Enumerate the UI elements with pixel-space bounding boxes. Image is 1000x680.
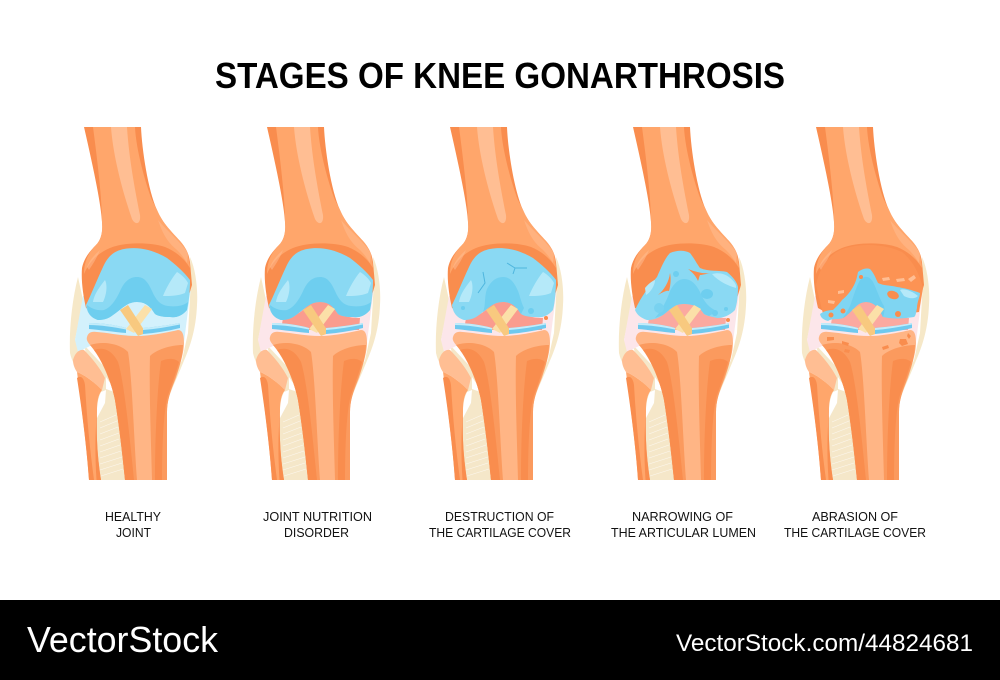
caption: healthy joint [105,510,162,540]
caption: destruction of the cartilage cover [429,510,571,540]
footer image id: VectorStock.com/44824681 [676,630,973,657]
knee 4: narrowing of the articular lumen [619,127,746,480]
knee 3: destruction of the cartilage cover [436,127,563,480]
caption: joint nutrition disorder: DISORDER [284,526,349,540]
knee 2: joint nutrition disorder [253,127,380,480]
red tissue [647,300,726,330]
inflamed synovium [807,287,923,352]
synovial fluid [75,287,191,352]
cracks [478,263,527,293]
cracks [658,269,710,295]
caption: abrasion of the cartilage cover: THE CARTILAGE COVER [784,526,926,540]
worn cartilage [820,268,920,321]
caption: healthy joint: HEALTHY [105,510,162,524]
footer bar [0,600,1000,680]
caption: joint nutrition disorder: JOINT NUTRITION [263,510,372,524]
tibial lesions [827,333,911,353]
captions [105,510,926,540]
exposed bone [816,245,923,318]
caption: narrowing of the articular lumen: THE ARTICULAR LUMEN [611,526,756,540]
cracked cartilage [452,248,556,320]
caption: abrasion of the cartilage cover: ABRASION OF [812,510,898,524]
red tissue [281,300,360,330]
footer logo text: VectorStock [27,619,219,660]
caption: destruction of the cartilage cover: THE CARTILAGE COVER [429,526,571,540]
red tissue [830,300,909,330]
caption: narrowing of the articular lumen [611,510,756,540]
healthy cartilage [86,248,190,320]
caption: abrasion of the cartilage cover [784,510,926,540]
thinning cartilage [269,248,373,320]
inflamed synovium [441,287,557,352]
caption: narrowing of the articular lumen: NARROWING OF [632,510,733,524]
red tissue [464,300,543,330]
title: STAGES OF KNEE GONARTHROSIS [215,55,785,96]
caption: joint nutrition disorder [263,510,372,540]
eroded cartilage [635,251,738,322]
inflamed synovium [258,287,374,352]
caption: healthy joint: JOINT [116,526,151,540]
knee 5: abrasion of the cartilage cover [802,127,929,480]
inflamed synovium [624,287,740,352]
knee 1: healthy joint [70,127,197,480]
bone lesions [886,289,900,301]
caption: destruction of the cartilage cover: DESTRUCTION OF [445,510,554,524]
bone fragments [828,275,916,304]
